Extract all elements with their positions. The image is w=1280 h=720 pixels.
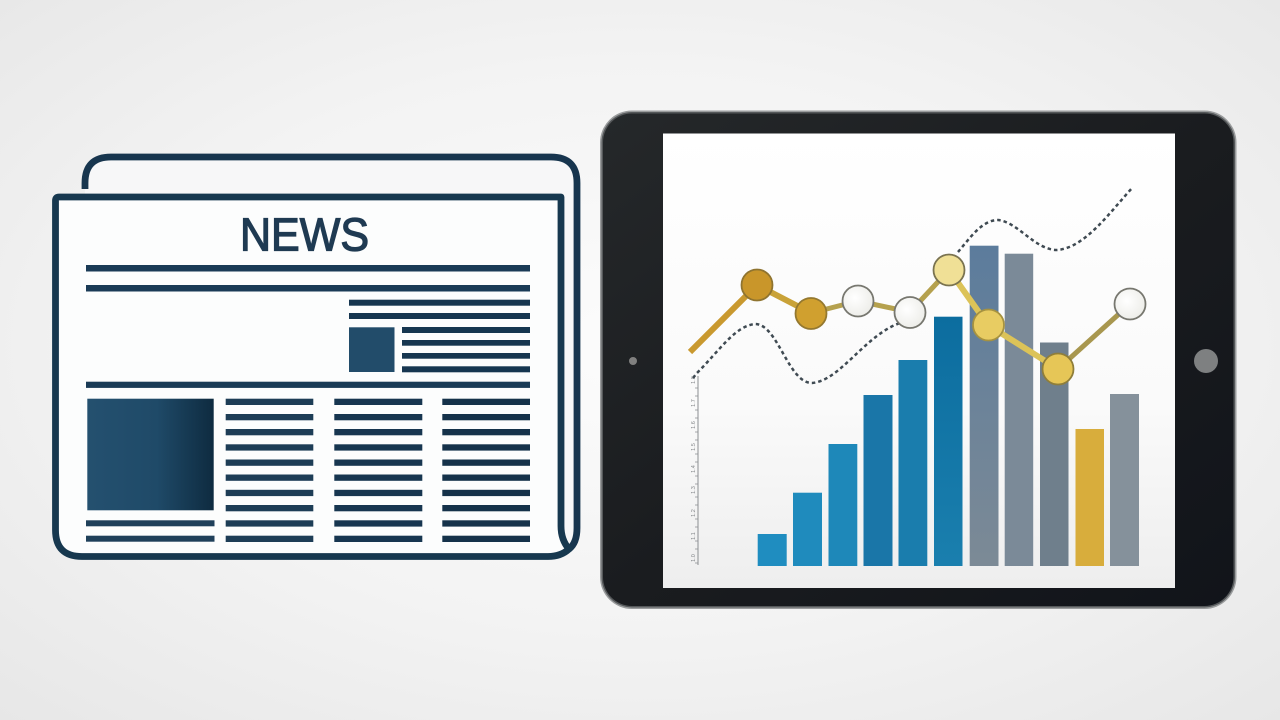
y axis <box>691 376 698 565</box>
data points <box>742 254 1146 384</box>
gold line series <box>690 254 1146 384</box>
small story image <box>349 327 394 372</box>
y axis: 1.5 <box>691 443 697 451</box>
y axis: 1.4 <box>691 465 697 473</box>
y axis: 1.0 <box>691 554 697 562</box>
text column 2 <box>334 399 422 542</box>
newspaper icon <box>56 157 577 556</box>
y axis: 1.1 <box>691 532 697 540</box>
text column 3 <box>442 399 530 542</box>
y axis: 1.6 <box>691 421 697 429</box>
front page <box>56 197 569 556</box>
y axis: 1.7 <box>691 399 697 407</box>
tablet body <box>600 110 1236 609</box>
tablet <box>600 110 1236 609</box>
text column 1 <box>226 399 313 542</box>
masthead: NEWS <box>240 208 369 260</box>
headline rules <box>86 265 530 292</box>
screen <box>663 134 1175 588</box>
back sheet <box>85 157 577 556</box>
caption lines <box>86 520 214 542</box>
camera <box>629 357 637 365</box>
dashed trend line <box>693 187 1133 383</box>
home button <box>1194 349 1218 373</box>
upper right story <box>349 300 530 372</box>
y axis: 1.3 <box>691 486 697 494</box>
large story image <box>87 399 214 510</box>
section rule <box>86 382 530 388</box>
y axis: 1.8 <box>691 376 697 384</box>
bar chart <box>758 246 1139 566</box>
y axis: 1.2 <box>691 509 697 517</box>
